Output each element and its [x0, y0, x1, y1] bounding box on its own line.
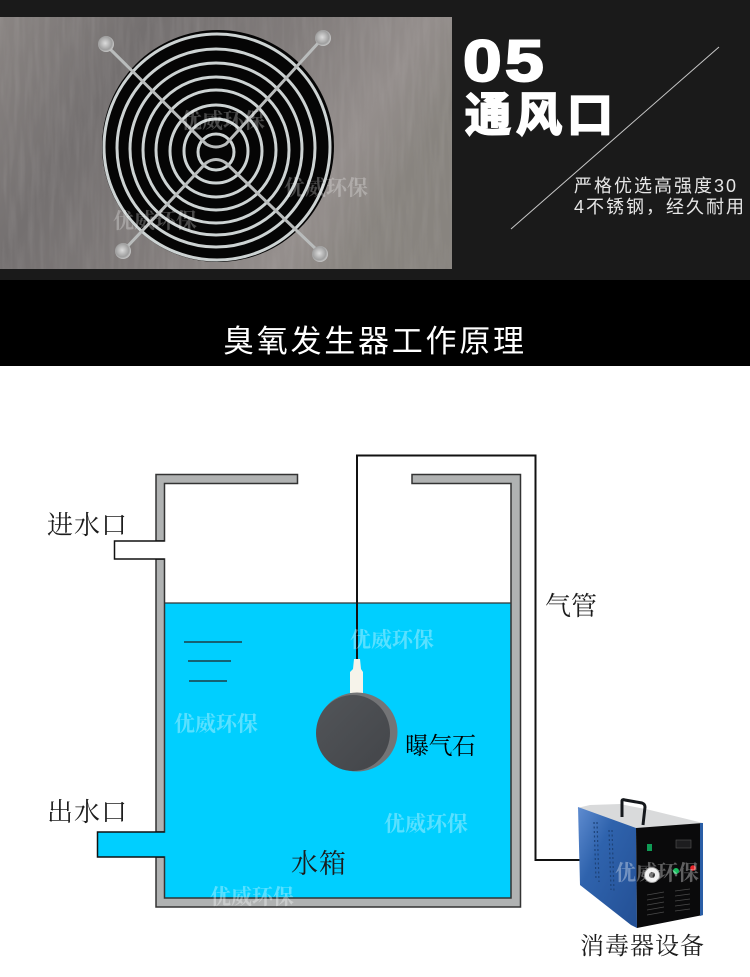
- watermark: device: 优威环保: [615, 861, 699, 885]
- watermark: photo centre: 优威环保: [181, 109, 265, 133]
- panel: dark header background: [0, 0, 750, 280]
- label: water tank: 水箱: [291, 849, 346, 879]
- diagonal rule: [511, 47, 719, 229]
- heading: vent: 通风口: [465, 89, 613, 141]
- watermark: right water: 优威环保: [384, 812, 468, 836]
- label: air tube: 气管: [545, 592, 597, 621]
- watermark: left water: 优威环保: [174, 712, 258, 736]
- watermark: tank bottom: 优威环保: [210, 885, 294, 909]
- panel: white diagram background: [0, 366, 750, 977]
- water surface line: [165, 602, 511, 604]
- label: inlet: 进水口: [47, 511, 127, 540]
- description text: 4不锈钢，经久耐用: [574, 197, 744, 217]
- label: device: 消毒器设备: [580, 933, 704, 960]
- photo: ventilation grille on brushed steel: [0, 17, 452, 269]
- description text: [574, 176, 744, 217]
- watermark: photo right: 优威环保: [284, 176, 368, 200]
- diagram: water in tank: [98, 603, 511, 898]
- label: outlet: 出水口: [47, 798, 127, 827]
- section title: 臭氧发生器工作原理: [223, 324, 524, 359]
- label: aeration stone: 曝气石: [405, 733, 476, 760]
- air tube: [357, 456, 580, 860]
- diagram: outlet pipe: [98, 832, 164, 857]
- heading number: 05: [463, 28, 544, 94]
- watermark: photo left: 优威环保: [113, 209, 197, 233]
- watermark: upper water: 优威环保: [350, 628, 434, 652]
- diagram: tank wall: [156, 474, 520, 907]
- description text: 严格优选高强度30: [574, 176, 736, 196]
- diagram: inlet pipe: [114, 541, 164, 559]
- icon: aeration stone: [316, 659, 398, 772]
- water ripple lines: [184, 642, 242, 681]
- panel: black title band: [0, 280, 750, 366]
- icon: ozone disinfection device: [577, 800, 703, 928]
